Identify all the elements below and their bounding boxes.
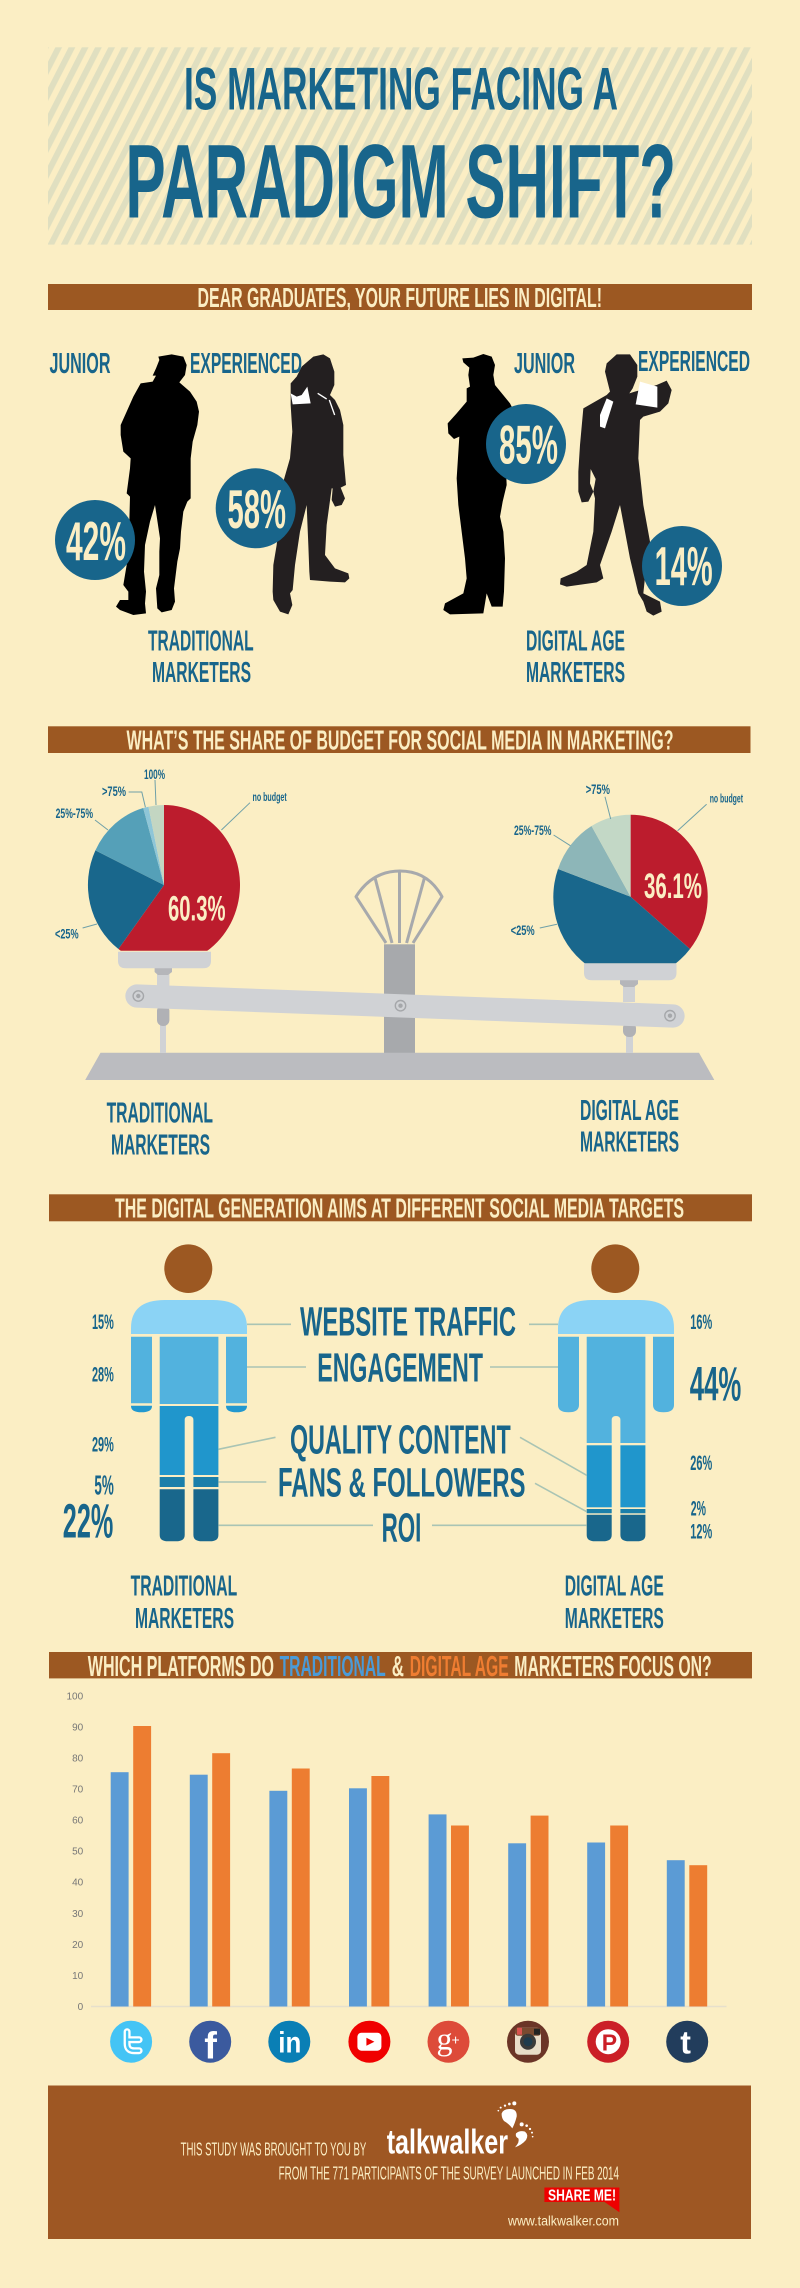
y axis labels: 50 [72, 1847, 84, 1858]
share me tag [544, 2187, 619, 2212]
traditional percentages: 22% [63, 1495, 113, 1548]
y axis labels: 90 [72, 1723, 84, 1734]
label: digital age marketers [580, 1095, 679, 1159]
icon: linkedin: in [278, 2027, 301, 2060]
icon: tumblr: t [680, 2025, 691, 2061]
pie labels: <25% [511, 922, 535, 938]
icon: pinterest: P [602, 2030, 617, 2056]
label: digital age marketers: MARKETERS [526, 657, 625, 689]
scale whisk top [356, 871, 442, 943]
text: 5% [94, 1469, 114, 1500]
y axis labels: 80 [72, 1754, 84, 1765]
digital age percentages: 12% [690, 1521, 712, 1544]
share me tag: SHARE ME! [548, 2187, 616, 2204]
silhouette: digital experienced [560, 354, 672, 616]
stat: 58%: 58% [228, 478, 286, 540]
left upper stem [155, 968, 172, 986]
beam bolts [133, 991, 675, 1021]
section heading: platforms: WHICH PLATFORMS DO [88, 1651, 274, 1683]
icon: google plus [428, 2021, 470, 2063]
target: fans and followers: FANS & FOLLOWERS [278, 1460, 526, 1506]
y axis labels: 20 [72, 1940, 84, 1951]
label: traditional marketers: TRADITIONAL [131, 1571, 237, 1603]
label: digital age marketers: DIGITAL AGE [580, 1095, 679, 1127]
y axis labels: 10 [72, 1971, 84, 1982]
credit text: THIS STUDY WAS BROUGHT TO YOU BY [181, 2140, 366, 2160]
right pan [584, 963, 676, 980]
pie value: 60.3% [168, 890, 226, 929]
traditional percentages [63, 1311, 114, 1548]
person figure: digital age [558, 1244, 674, 1541]
logo footprints [497, 2101, 533, 2147]
traditional percentages: 15% [92, 1311, 114, 1334]
pie labels: no budget [252, 790, 287, 804]
traditional percentages: 29% [92, 1434, 114, 1457]
scale beam [137, 996, 673, 1016]
pie value: 36.1% [644, 867, 702, 906]
label: traditional marketers: MARKETERS [135, 1603, 234, 1635]
person figure: traditional [131, 1244, 247, 1541]
label: traditional marketers: MARKETERS [111, 1129, 210, 1161]
stat: 42%: 42% [66, 510, 126, 572]
label: digital age marketers [526, 626, 625, 689]
label: digital age marketers: MARKETERS [580, 1127, 679, 1159]
pie labels: 25%-75% [514, 822, 552, 838]
talkwalker logo: talkwalker [387, 2123, 508, 2161]
target: engagement: ENGAGEMENT [317, 1344, 483, 1390]
y axis labels: 30 [72, 1909, 84, 1920]
digital age percentages: 16% [690, 1311, 712, 1334]
panel: scale illustration [85, 871, 714, 1080]
section heading: platforms: & [392, 1651, 404, 1683]
scale base [85, 1053, 714, 1080]
icon: google plus: g [436, 2021, 452, 2057]
label: traditional marketers: TRADITIONAL [107, 1097, 213, 1129]
pie labels: >75% [102, 783, 126, 799]
target: website traffic: WEBSITE TRAFFIC [300, 1299, 516, 1345]
bar chart: platforms [67, 1692, 726, 2013]
label: digital age marketers: DIGITAL AGE [526, 626, 625, 658]
silhouette: digital junior [443, 354, 512, 614]
section heading: platforms: DIGITAL AGE [410, 1651, 509, 1683]
stat: 58% [216, 468, 296, 548]
y axis labels: 100 [67, 1692, 84, 1703]
pie labels: <25% [55, 926, 79, 942]
title banner [48, 47, 752, 245]
pie labels: 100% [144, 766, 165, 782]
section heading: platforms: TRADITIONAL [280, 1651, 386, 1683]
section heading: platforms [49, 1651, 752, 1683]
label: experienced traditional: EXPERIENCED [190, 348, 302, 380]
label: traditional marketers: MARKETERS [152, 657, 251, 689]
digital age percentages [690, 1311, 741, 1544]
digital age percentages: 2% [691, 1498, 706, 1521]
icon: twitter [110, 2021, 152, 2063]
x axis [91, 2006, 726, 2008]
label: traditional marketers: TRADITIONAL [148, 626, 254, 658]
icon: linkedin [268, 2021, 310, 2063]
y axis labels: 40 [72, 1878, 84, 1889]
footer panel [48, 2086, 751, 2239]
pie leaders [540, 797, 707, 928]
icon: instagram [507, 2021, 549, 2063]
right upper stem [620, 980, 638, 1002]
y axis labels: 70 [72, 1785, 84, 1796]
right lower stem [623, 1022, 636, 1053]
stat: 14% [642, 526, 722, 606]
pie labels: >75% [586, 781, 610, 797]
pie chart: traditional marketers [55, 766, 287, 965]
label: digital age marketers: MARKETERS [565, 1603, 664, 1635]
silhouette: traditional experienced [273, 354, 349, 614]
digital age percentages: 44% [690, 1359, 741, 1412]
label: junior traditional: JUNIOR [50, 348, 111, 380]
icon: facebook: f [204, 2026, 217, 2068]
scale post [384, 944, 415, 1053]
y axis labels: 60 [72, 1816, 84, 1827]
label: traditional marketers [148, 626, 254, 689]
traditional bars [111, 1772, 685, 2006]
left lower stem [157, 1005, 169, 1053]
digital age percentages: 26% [690, 1452, 712, 1475]
icon: tumblr [666, 2021, 708, 2063]
label: traditional marketers [131, 1571, 237, 1635]
website url: www.talkwalker.com [507, 2214, 619, 2228]
silhouette: traditional junior [116, 354, 199, 615]
stat: 42% [55, 500, 135, 580]
target: roi: ROI [382, 1505, 421, 1551]
panel: graduates silhouettes [50, 346, 750, 689]
label: digital age marketers: DIGITAL AGE [565, 1571, 664, 1603]
pie chart: digital age marketers [511, 781, 743, 979]
y axis labels [67, 1692, 84, 2013]
stat: 85%: 85% [499, 413, 558, 475]
label: traditional marketers [107, 1097, 213, 1161]
pie labels [511, 781, 743, 938]
label: digital age marketers [565, 1571, 664, 1635]
traditional percentages: 28% [92, 1364, 114, 1387]
icon: pinterest [587, 2021, 629, 2063]
left pan [118, 952, 211, 968]
pie leaders [83, 780, 250, 928]
pie labels [55, 766, 287, 942]
pie labels: 25%-75% [56, 805, 93, 821]
y axis labels: 0 [78, 2002, 84, 2013]
target: quality content: QUALITY CONTENT [290, 1416, 511, 1462]
icon: youtube [348, 2021, 390, 2063]
stat: 85% [486, 404, 566, 484]
talkwalker logo [387, 2101, 533, 2161]
stat: 14%: 14% [655, 535, 713, 597]
icon: facebook [189, 2021, 231, 2068]
pie labels: no budget [710, 792, 743, 806]
label: junior digital: JUNIOR [514, 348, 575, 380]
digital age bars [133, 1726, 707, 2006]
connector lines [218, 1324, 587, 1525]
icon: google plus: + [452, 2032, 460, 2048]
